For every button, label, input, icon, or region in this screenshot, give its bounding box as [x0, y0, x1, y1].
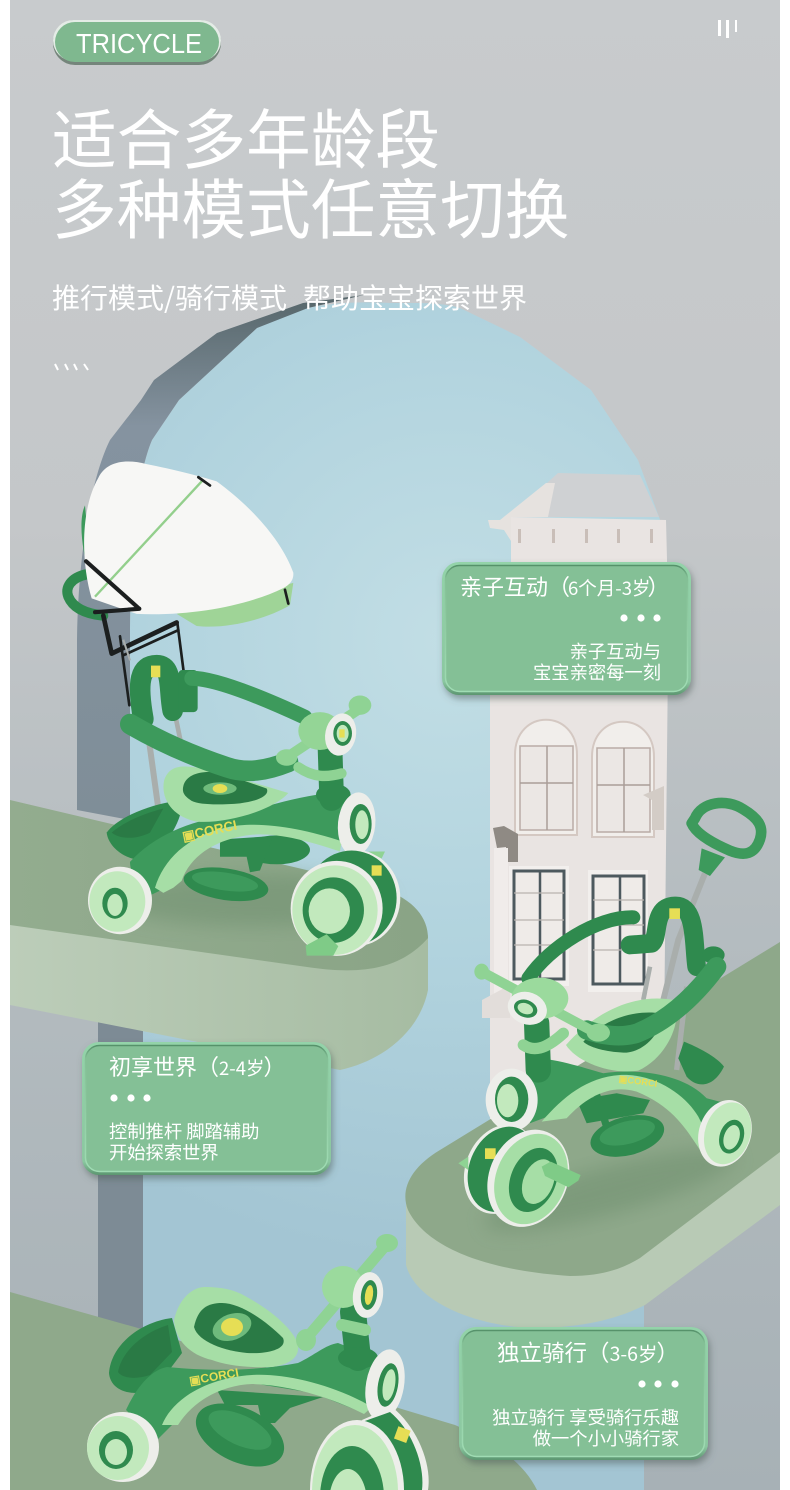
callout: independent riding 3 to 6 years: 独立骑行（3-6岁） [497, 1336, 679, 1368]
main frame: ▣CORCI [618, 1074, 658, 1089]
main frame [130, 795, 348, 895]
steering wheel [338, 792, 376, 851]
backrest [630, 906, 725, 967]
tricycle: push mode with canopy [67, 462, 400, 956]
upper-left platform [10, 800, 428, 1070]
handlebar [474, 964, 610, 1042]
big rear wheel [310, 1407, 429, 1490]
under-frame parts and pedal trays [182, 835, 310, 906]
subtitle: 帮助宝宝探索世界 [303, 277, 527, 317]
right platform [405, 942, 780, 1328]
big rear wheel [291, 850, 400, 956]
icon: corner bars [718, 20, 737, 38]
basket [109, 1318, 182, 1393]
callout: independent riding 3 to 6 years: 独立骑行 享受骑行乐趣 [492, 1404, 679, 1430]
title: 多种模式任意切换 [52, 158, 570, 252]
seat [163, 767, 288, 822]
subtitle [52, 277, 527, 317]
badge: TRICYCLE [53, 20, 221, 65]
callout: parent-child 6 months to 3 years: 亲子互动与 [570, 638, 661, 664]
subtitle: 骑行模式 [175, 277, 287, 317]
seat [566, 999, 677, 1071]
callout: first world 2 to 4 years: 开始探索世界 [109, 1139, 219, 1165]
tricycle: riding mode [87, 1234, 429, 1490]
building [482, 473, 668, 1130]
push handle [643, 803, 761, 1070]
title [52, 88, 570, 252]
steering neck [298, 747, 351, 806]
small rear wheel [87, 1412, 159, 1482]
subtitle: / [164, 277, 175, 317]
callout: first world 2 to 4 years: 初享世界（2-4岁） [109, 1050, 286, 1082]
frame poles [103, 616, 184, 833]
steering neck [338, 1312, 378, 1369]
rear rail [192, 678, 305, 717]
badge: TRICYCLE: TRICYCLE [76, 28, 202, 59]
front rail [130, 724, 288, 771]
callout: independent riding 3 to 6 years: 做一个小小骑行家 [533, 1425, 679, 1451]
main frame: ▣CORCI [188, 1365, 240, 1388]
tricycle: push mode facing left [451, 803, 761, 1239]
lower-left platform [10, 1292, 537, 1490]
arch shaded edge and pillar [77, 295, 364, 820]
basket [678, 1042, 724, 1084]
subtitle: 推行模式 [52, 277, 164, 317]
handlebar [276, 696, 371, 766]
steering wheel [360, 1346, 410, 1424]
canopy [81, 462, 293, 627]
rear wheel small [698, 1100, 752, 1167]
callout: first world 2 to 4 years [82, 1042, 331, 1175]
title: 适合多年龄段 [52, 88, 440, 182]
callout: parent-child 6 months to 3 years: 亲子互动（6个月-3岁） [460, 570, 670, 602]
callout: independent riding 3 to 6 years [459, 1327, 708, 1460]
steering wheel [486, 1069, 538, 1131]
main frame [527, 1058, 723, 1150]
main frame [126, 1343, 389, 1440]
callout: first world 2 to 4 years: 控制推杆 脚踏辅助 [109, 1118, 259, 1144]
callout: parent-child 6 months to 3 years [442, 562, 691, 695]
under-frame parts and foot tray [186, 1390, 323, 1479]
big front wheel [458, 1126, 580, 1227]
small rear wheel [88, 867, 152, 934]
foot tray and under-frame [579, 1093, 664, 1157]
handlebar [296, 1234, 398, 1351]
backrest [140, 666, 198, 719]
callout: parent-child 6 months to 3 years: 宝宝亲密每一刻 [533, 659, 661, 685]
main frame: ▣CORCI [181, 817, 238, 844]
seat [174, 1287, 298, 1367]
lower pillar [98, 1000, 143, 1340]
decorative ticks [55, 364, 88, 370]
push handle [67, 574, 103, 616]
front rail [587, 967, 717, 1036]
rear rail [528, 917, 633, 978]
steering neck [523, 1023, 563, 1070]
basket [107, 802, 180, 860]
sky-blue arch [130, 302, 662, 1490]
